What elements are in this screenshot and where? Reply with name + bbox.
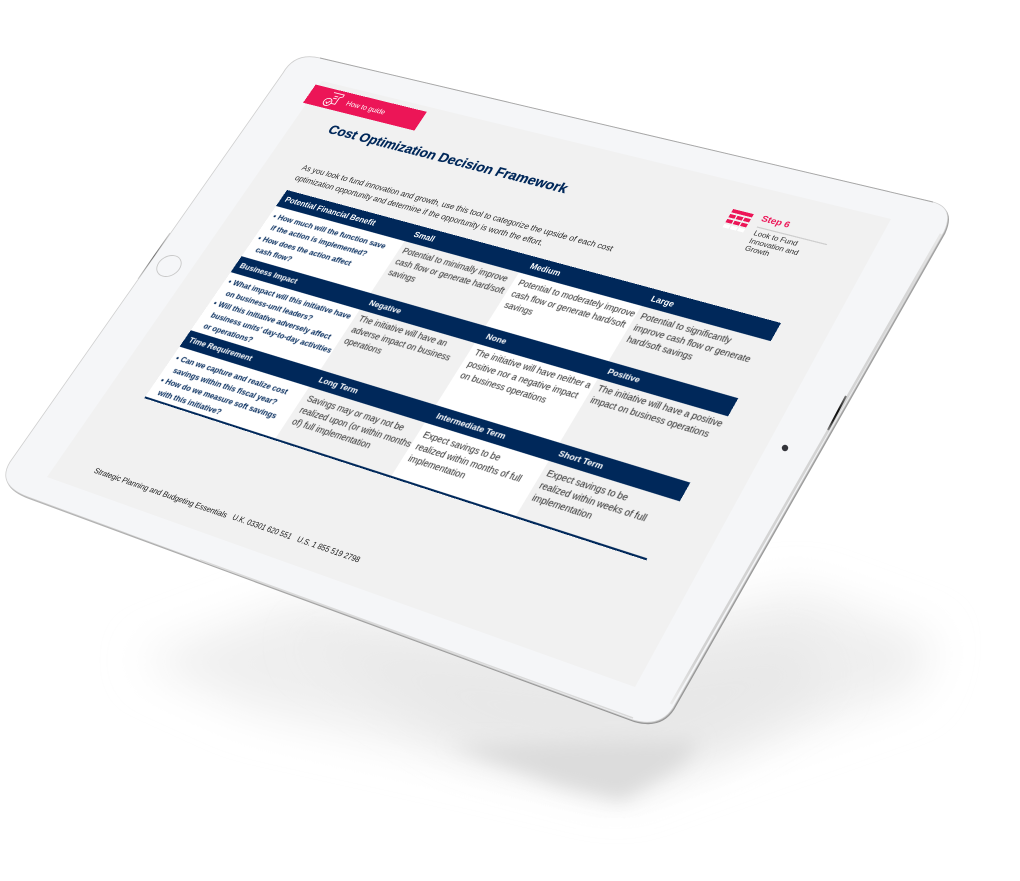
footer [92, 466, 362, 564]
large description: improve cash flow or generate [632, 323, 753, 364]
home button [153, 251, 185, 281]
screen [47, 81, 891, 687]
step description: Growth [743, 244, 772, 258]
questions: • [226, 277, 234, 286]
US phone: U.S. 1 855 519 2798 [295, 535, 362, 564]
question cell background [191, 272, 360, 370]
questions: • [271, 212, 279, 220]
questions: How much will the function save [276, 213, 388, 250]
step label: Step 6 [759, 214, 792, 230]
small description: cash flow or generate hard/soft [393, 257, 507, 295]
questions: with this initiative? [156, 388, 224, 416]
icon: document and coin [322, 92, 345, 106]
questions: on business-unit leaders? [224, 289, 315, 322]
column label: Positive [606, 367, 642, 384]
row 2: business impact [191, 256, 738, 442]
column label: Large [649, 294, 676, 309]
column label: Long Term [317, 375, 361, 395]
questions: business units' day-to-day activities [209, 311, 334, 355]
column label: Time Requirement [187, 335, 255, 363]
column label: Negative [367, 298, 404, 315]
small description [239, 222, 786, 382]
none description [458, 347, 593, 405]
intro text [190, 108, 781, 468]
column label: Intermediate Term [434, 411, 508, 441]
questions: cash flow? [254, 245, 294, 263]
intro text: optimization opportunity and determine if the opportunity is worth the effort. [293, 174, 545, 247]
questions: Can we capture and realize cost [179, 355, 290, 396]
UK phone: U.K. 03301 620 551 [230, 513, 294, 541]
left edge highlight [138, 233, 170, 279]
none description: The initiative will have neither a [473, 347, 593, 390]
medium description [239, 214, 786, 382]
small description: Potential to minimally improve [400, 246, 510, 283]
camera [782, 445, 788, 451]
step description [743, 229, 801, 258]
questions: if the action is implemented? [269, 223, 369, 258]
questions: How does the action affect [261, 235, 354, 267]
medium description: cash flow or generate hard/soft [509, 289, 628, 329]
positive description: The initiative will have a positive [595, 383, 725, 429]
none description: positive nor a negative impact [465, 359, 581, 400]
questions: savings within this fiscal year? [171, 366, 280, 407]
short description: Expect savings to be [545, 468, 631, 503]
column label: Small [412, 230, 437, 243]
top rim [320, 58, 933, 202]
tablet bezel [6, 57, 948, 722]
power button highlight [828, 396, 846, 430]
questions: How do we measure soft savings [163, 377, 279, 420]
short description: implementation [530, 492, 595, 521]
intermediate cell background [391, 423, 549, 517]
step description: Innovation and [748, 236, 801, 257]
right rim [671, 234, 941, 704]
how-to guide tag [303, 85, 427, 131]
column label: Business Impact [238, 261, 300, 285]
negative description: The initiative will have an [357, 314, 450, 348]
questions: or operations? [201, 321, 255, 344]
negative description: adverse impact on business [349, 325, 453, 362]
bottom rim [200, 560, 633, 718]
tag label: How to guide [344, 100, 387, 116]
questions: • [212, 298, 219, 307]
large description [239, 214, 753, 382]
large description: hard/soft savings [625, 334, 695, 362]
column label: Potential Financial Benefit [283, 195, 378, 227]
medium description: savings [502, 300, 535, 317]
row 1: potential financial benefit [242, 190, 781, 364]
step description: Look to Fund [752, 229, 800, 248]
tablet edge [7, 58, 948, 724]
title: Cost Optimization Decision Framework [325, 122, 571, 196]
row 3: time requirement [144, 330, 690, 560]
short description: realized within weeks of full [537, 480, 649, 523]
step divider [757, 226, 827, 245]
column label: Medium [528, 261, 563, 278]
questions: • [256, 234, 264, 242]
column label: None [484, 332, 509, 346]
medium cell background [485, 272, 641, 361]
none cell background [436, 343, 598, 443]
none description: on business operations [458, 370, 549, 405]
questions [230, 92, 751, 420]
large description: Potential to significantly [638, 311, 734, 345]
medium description: Potential to moderately improve [516, 278, 638, 319]
positive description: impact on business operations [588, 395, 712, 439]
negative description: operations [342, 336, 384, 356]
long term description: Savings may or may not be [305, 393, 407, 433]
step 6 badge [723, 209, 827, 258]
table bottom rule [144, 396, 647, 560]
icon: brick grid [723, 209, 754, 232]
question cell background [242, 206, 405, 293]
header bar [180, 330, 690, 501]
document on tablet screen [92, 84, 827, 564]
long term description: of) full implementation [290, 416, 373, 450]
questions [156, 353, 290, 420]
intermediate description: Expect savings to be [421, 429, 503, 463]
questions [201, 277, 354, 355]
question cell background [145, 347, 309, 439]
questions: • [159, 375, 167, 384]
questions: • [174, 353, 182, 362]
intro text: As you look to fund innovation and growth, use this tool to categorize the upside of each cost [300, 163, 615, 253]
intermediate description: realized within months of full [414, 441, 524, 484]
header bar [276, 190, 781, 341]
small description: savings [386, 268, 418, 284]
questions: What impact will this initiative have [231, 278, 354, 321]
long term description: realized upon (or within months [297, 405, 414, 449]
column label: Short Term [557, 448, 606, 471]
questions: Will this initiative adversely affect [216, 300, 333, 341]
footer title: Strategic Planning and Budgeting Essentials [92, 466, 230, 520]
intermediate description: implementation [406, 453, 468, 480]
header bar [231, 256, 738, 416]
